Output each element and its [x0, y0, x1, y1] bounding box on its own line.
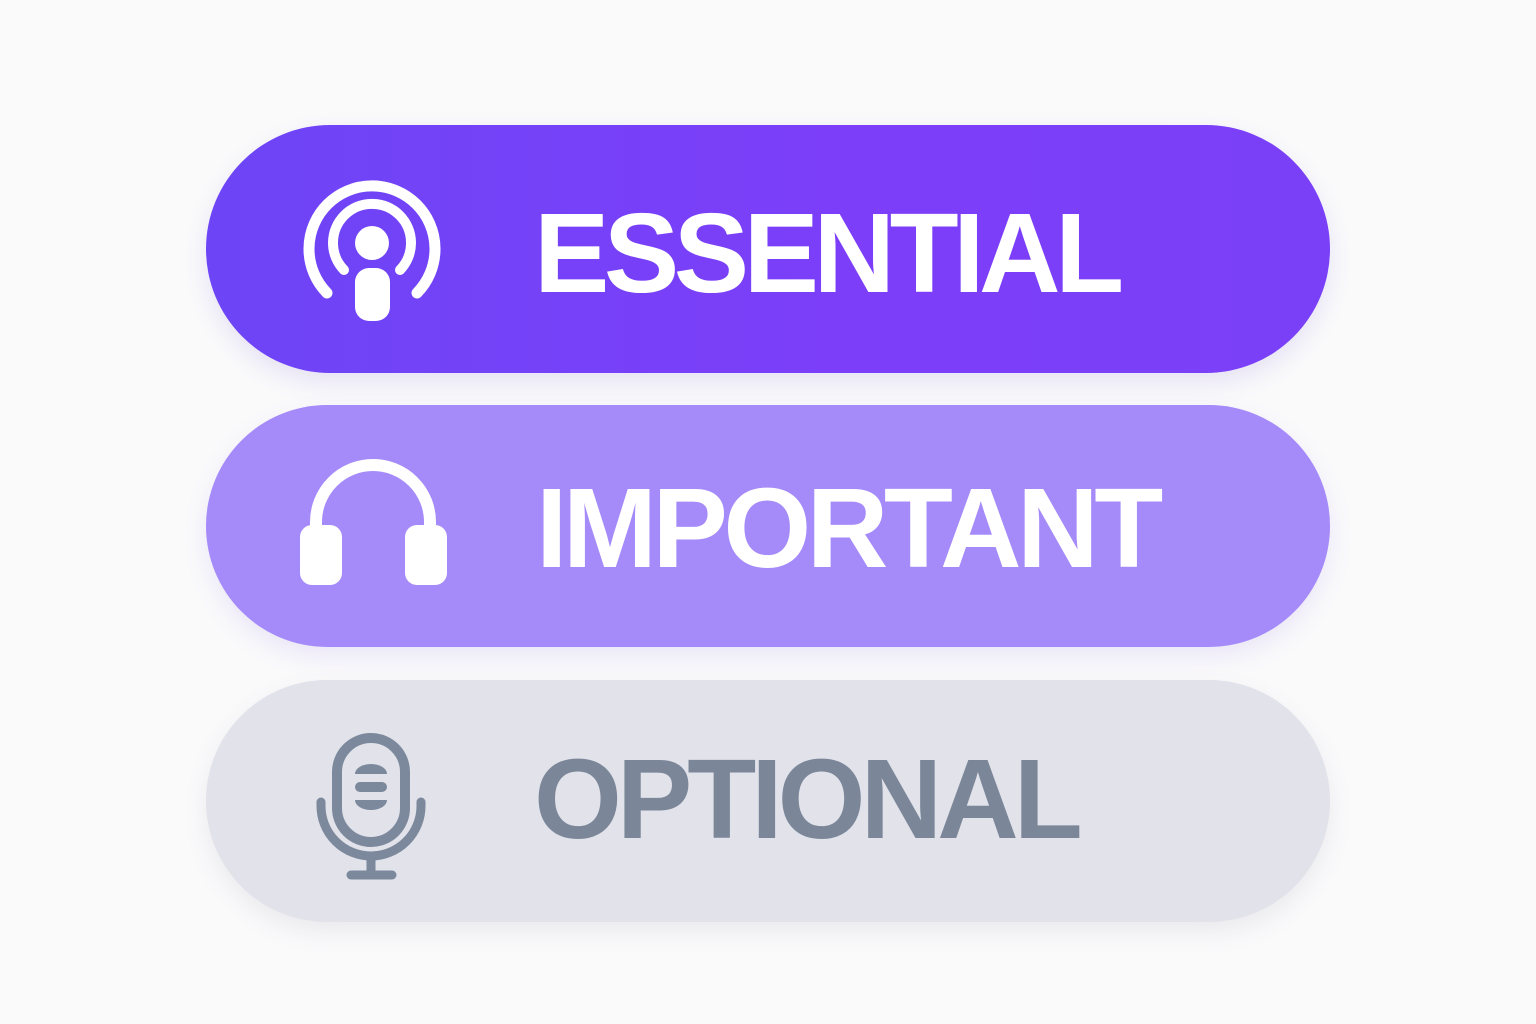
icon: podcast: [304, 180, 440, 321]
text: important: IMPORTANT: [536, 465, 1159, 591]
icon: microphone: [316, 733, 426, 880]
text: essential: ESSENTIAL: [534, 190, 1119, 316]
pill: optional: [206, 680, 1330, 922]
pill: important: [206, 405, 1330, 647]
icon: headphones: [300, 459, 447, 585]
text: optional: OPTIONAL: [534, 736, 1078, 862]
pill: essential: [206, 125, 1330, 373]
